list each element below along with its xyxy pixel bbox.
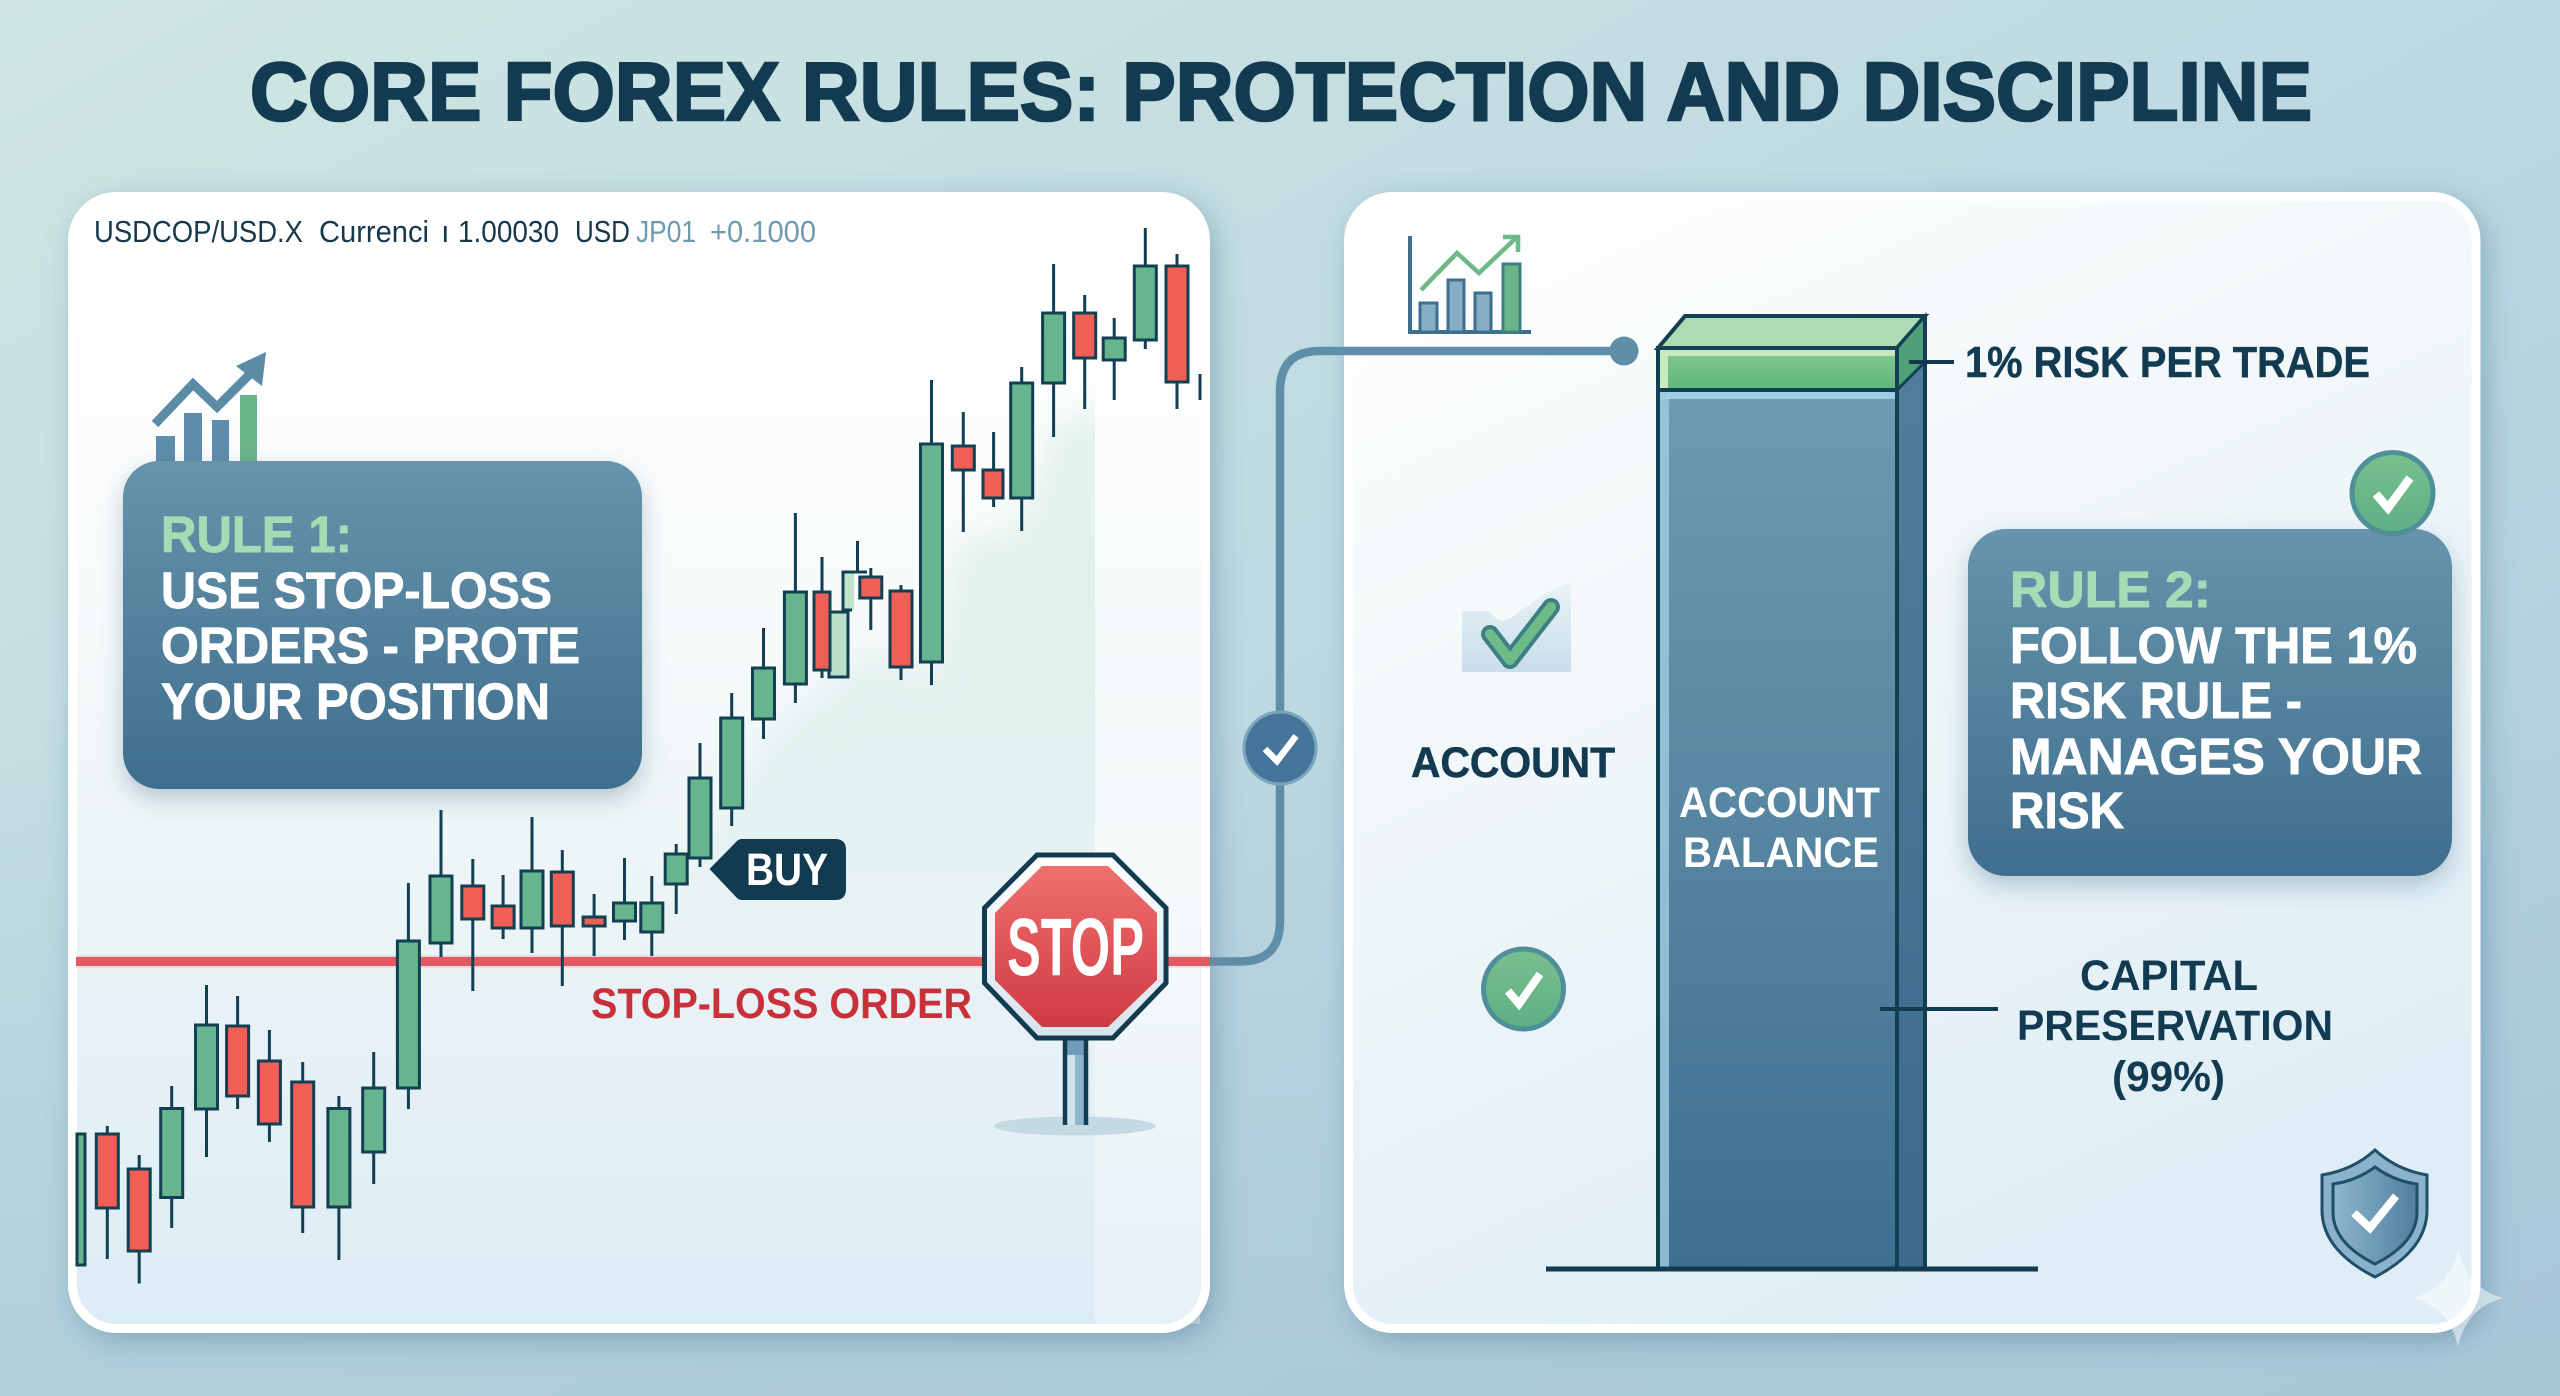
stop-loss order label: STOP-LOSS ORDER [591, 980, 972, 1028]
rule 2 text: FOLLOW THE 1% [2010, 617, 2417, 674]
bar label: BALANCE [1683, 829, 1879, 877]
price ticker header: ı [441, 214, 450, 249]
stop-loss line [76, 955, 1210, 968]
rule 1 text: USE STOP-LOSS [161, 562, 552, 619]
capital preservation label: (99%) [2112, 1053, 2225, 1101]
rule 2 text: RISK [2010, 782, 2124, 839]
rule 2 text: RULE 2: [2010, 561, 2211, 618]
chart background wedge [724, 405, 1095, 864]
icon: bar chart with arrow [1410, 236, 1531, 332]
icon: shield [2322, 1150, 2427, 1277]
buy tag: BUY [746, 844, 828, 895]
buy tag [710, 839, 846, 900]
capital preservation label: PRESERVATION [2017, 1002, 2333, 1050]
price ticker header: Currenci [319, 214, 429, 249]
price ticker header: +0.1000 [710, 214, 816, 249]
check badge top right [2352, 452, 2433, 534]
bar label [1679, 779, 1880, 877]
rule 1 text: ORDERS - PROTE [161, 617, 580, 674]
account balance bar [1658, 316, 1925, 1267]
price ticker header: 1.00030 [458, 214, 559, 249]
rule 2 callout [1968, 529, 2452, 876]
rule 2 text [2010, 561, 2422, 839]
account label: ACCOUNT [1411, 739, 1615, 787]
icon: stop sign: STOP [1007, 902, 1144, 993]
connector check badge [1244, 712, 1316, 784]
price ticker header: USDCOP/USD.X [94, 214, 303, 249]
check badge left [1484, 949, 1564, 1029]
rule 2 text: RISK RULE - [2010, 672, 2302, 729]
sparkle watermark [2413, 1249, 2503, 1347]
rule 2 text: MANAGES YOUR [2010, 728, 2422, 785]
candlestick chart [77, 228, 1200, 1284]
price ticker header [94, 214, 816, 249]
connector between panels [1210, 336, 1638, 962]
icon: account check [1462, 582, 1571, 672]
title: CORE FOREX RULES: PROTECTION AND DISCIPLINE [250, 45, 2312, 138]
icon: growth chart [155, 352, 266, 463]
price ticker header: JP01 [636, 214, 696, 249]
rule 1 text: RULE 1: [161, 506, 352, 563]
rule 1 text [161, 506, 580, 730]
1% risk label: 1% RISK PER TRADE [1965, 338, 2370, 387]
capital preservation label: CAPITAL [2080, 952, 2258, 1000]
right lighter strip [1095, 600, 1200, 1324]
baseline [1546, 1266, 2038, 1272]
price ticker header: USD [575, 214, 630, 249]
panel: stop-loss rule [72, 196, 1210, 1328]
panel: 1% risk rule [1348, 196, 2476, 1328]
capital preservation label [1880, 952, 2333, 1101]
icon: stop sign [984, 855, 1166, 1136]
rule 1 text: YOUR POSITION [161, 673, 550, 730]
bar label: ACCOUNT [1679, 779, 1880, 827]
rule 1 callout [123, 461, 642, 789]
